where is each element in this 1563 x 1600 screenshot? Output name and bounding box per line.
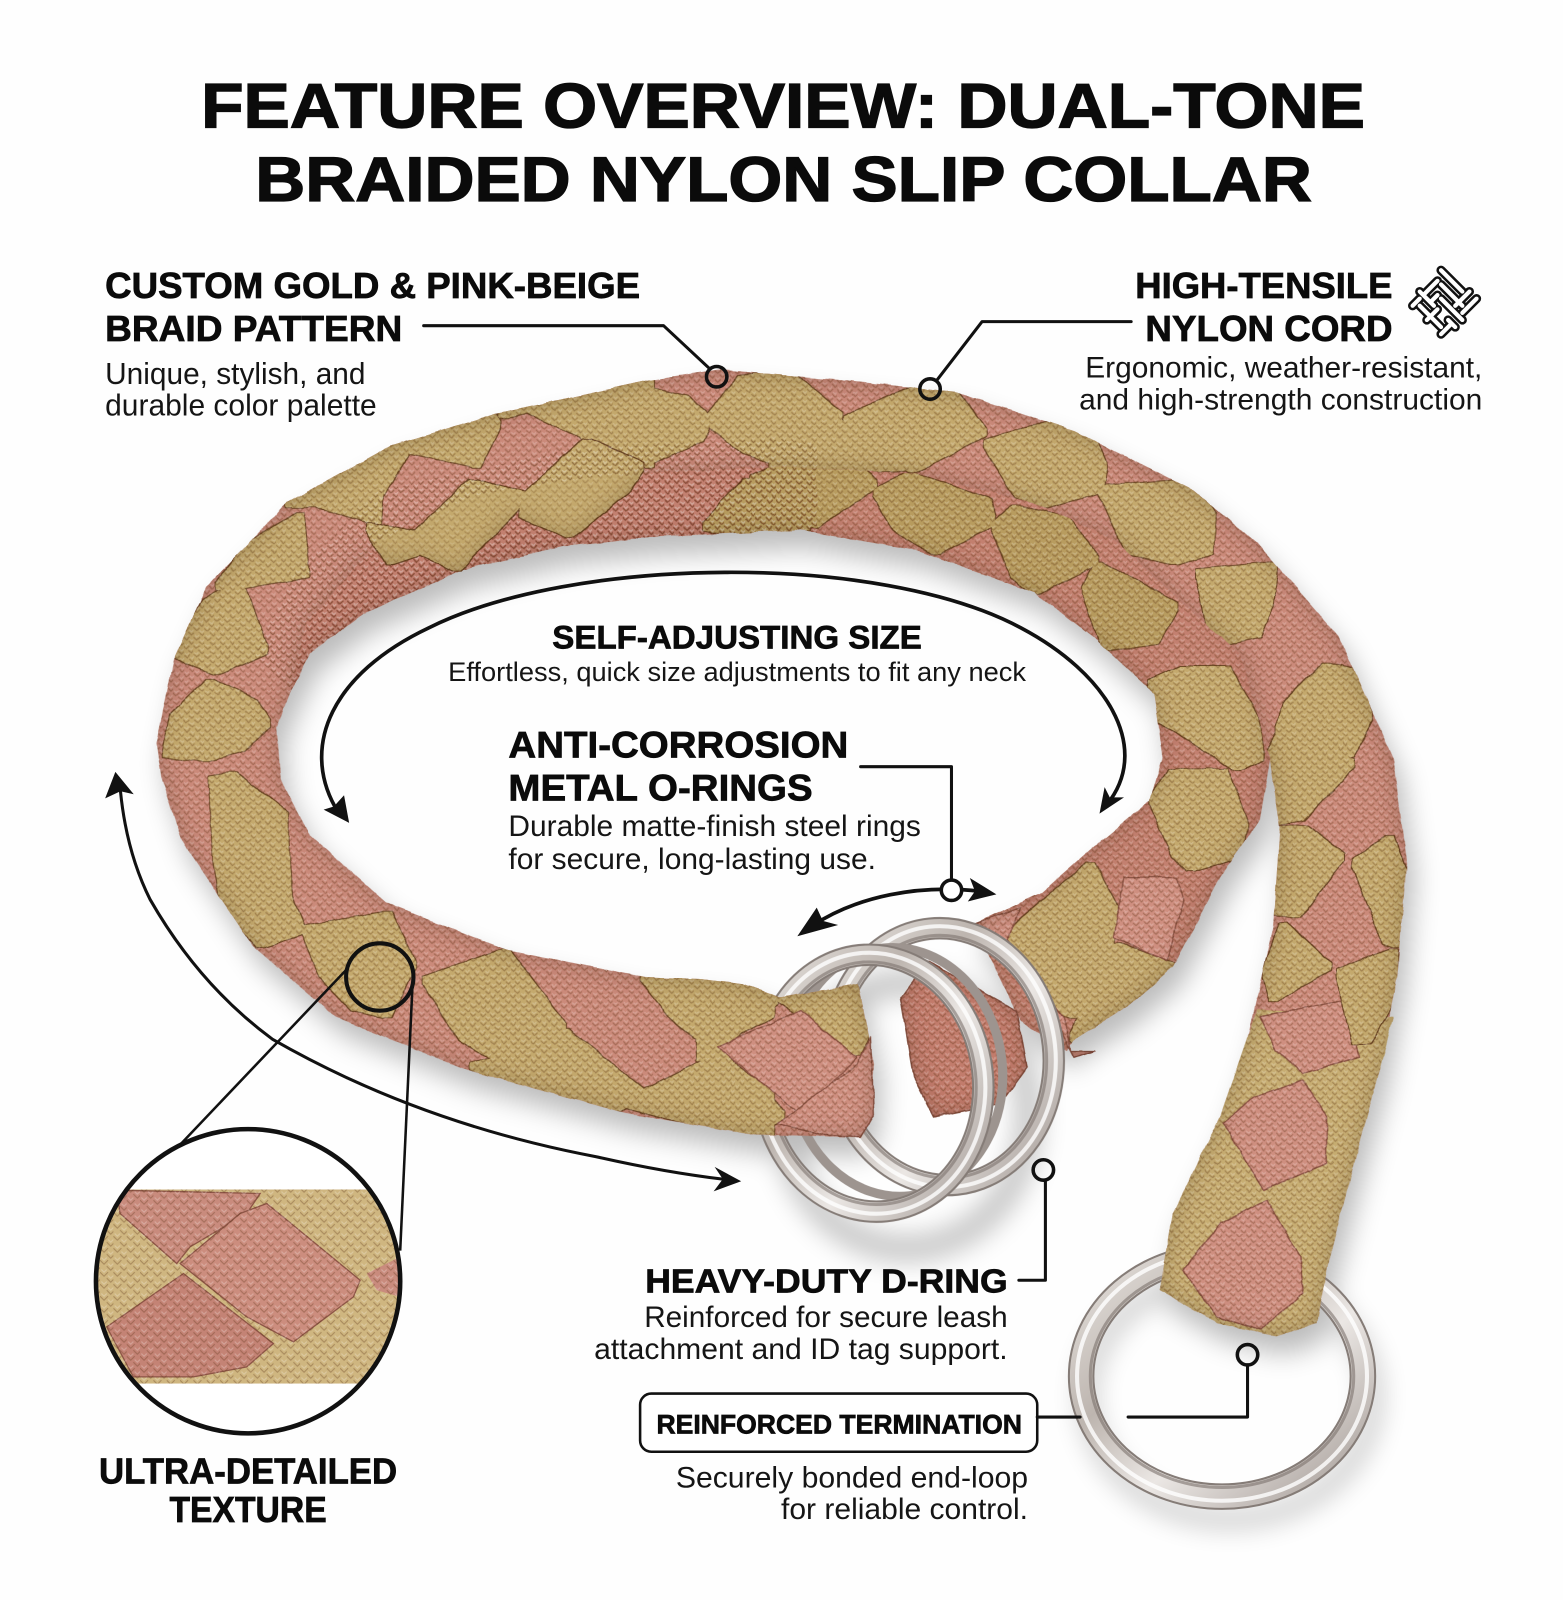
front metal O-ring [748, 942, 998, 1225]
collar soft shadow [164, 388, 1415, 1519]
callout: reinforced termination: REINFORCED TERMINATION [656, 1409, 1022, 1439]
callout: custom gold and pink-beige braid pattern [105, 266, 727, 423]
callout: reinforced termination [640, 1345, 1258, 1526]
outer collar strand and tail [156, 370, 1407, 1336]
callout: anti-corrosion metal O-rings: for secure, long-lasting use. [508, 843, 876, 876]
weave over the crossing leaves [256, 438, 818, 692]
callout: anti-corrosion metal O-rings: Durable matte-finish steel rings [508, 810, 921, 843]
gold braid segments of the outer strand [167, 373, 1403, 1134]
callout: high-tensile nylon cord: NYLON CORD [1145, 309, 1393, 349]
callout: high-tensile nylon cord [920, 266, 1482, 416]
callout: custom gold and pink-beige braid pattern: BRAID PATTERN [105, 309, 402, 349]
title: FEATURE OVERVIEW: DUAL-TONE [201, 72, 1365, 142]
title [201, 72, 1365, 215]
callout: anti-corrosion metal O-rings [508, 725, 951, 879]
label: ultra-detailed texture: TEXTURE [169, 1490, 327, 1530]
callout: reinforced termination: Securely bonded end-loop [676, 1461, 1028, 1494]
arrow: O-ring movement [797, 878, 996, 936]
callout: custom gold and pink-beige braid pattern: durable color palette [105, 389, 377, 423]
callout: heavy-duty D-ring [594, 1160, 1054, 1366]
callout: custom gold and pink-beige braid pattern: CUSTOM GOLD & PINK-BEIGE [105, 266, 640, 306]
middle metal O-ring [778, 937, 1015, 1207]
callout: high-tensile nylon cord: HIGH-TENSILE [1135, 266, 1393, 306]
arrow: self-adjusting arc [322, 572, 1125, 823]
callout: self-adjusting size: Effortless, quick size adjustments to fit any neck [448, 657, 1027, 687]
back metal O-ring [818, 915, 1069, 1198]
callout: heavy-duty D-ring: Reinforced for secure leash [644, 1301, 1008, 1334]
pink knot at the rope end [717, 1011, 874, 1137]
callout: self-adjusting size [448, 618, 1027, 687]
title: BRAIDED NYLON SLIP COLLAR [255, 145, 1312, 215]
callout: self-adjusting size: SELF-ADJUSTING SIZE [552, 618, 922, 655]
arrow: long sweep along collar [105, 772, 741, 1191]
callout: heavy-duty D-ring: HEAVY-DUTY D-RING [645, 1263, 1008, 1300]
icon: woven cord [1409, 267, 1480, 338]
gold leaves crossing onto the inner strand [370, 443, 640, 567]
label: ultra-detailed texture: ULTRA-DETAILED [99, 1451, 397, 1491]
inner collar strand [255, 439, 1270, 1057]
label: ultra-detailed texture [99, 1451, 397, 1530]
magnified texture circle [90, 1129, 403, 1433]
callout: heavy-duty D-ring: attachment and ID tag support. [594, 1333, 1008, 1366]
pink rope loop inside rings [900, 961, 1027, 1117]
end-loop metal ring [1077, 1252, 1367, 1501]
callout: anti-corrosion metal O-rings: METAL O-RINGS [508, 767, 813, 808]
callout: reinforced termination: for reliable control. [781, 1493, 1028, 1526]
callout: anti-corrosion metal O-rings: ANTI-CORROSION [508, 725, 848, 766]
pink accents near the rope end [974, 877, 1184, 1057]
gold braid segments of the inner strand [707, 468, 1260, 1047]
callout: high-tensile nylon cord: and high-strength construction [1079, 383, 1482, 416]
callout: custom gold and pink-beige braid pattern: Unique, stylish, and [105, 357, 365, 391]
magnifier source ring and connector lines [174, 943, 413, 1251]
callout: high-tensile nylon cord: Ergonomic, weather-resistant, [1085, 352, 1482, 385]
tail end braid [1160, 1000, 1394, 1336]
